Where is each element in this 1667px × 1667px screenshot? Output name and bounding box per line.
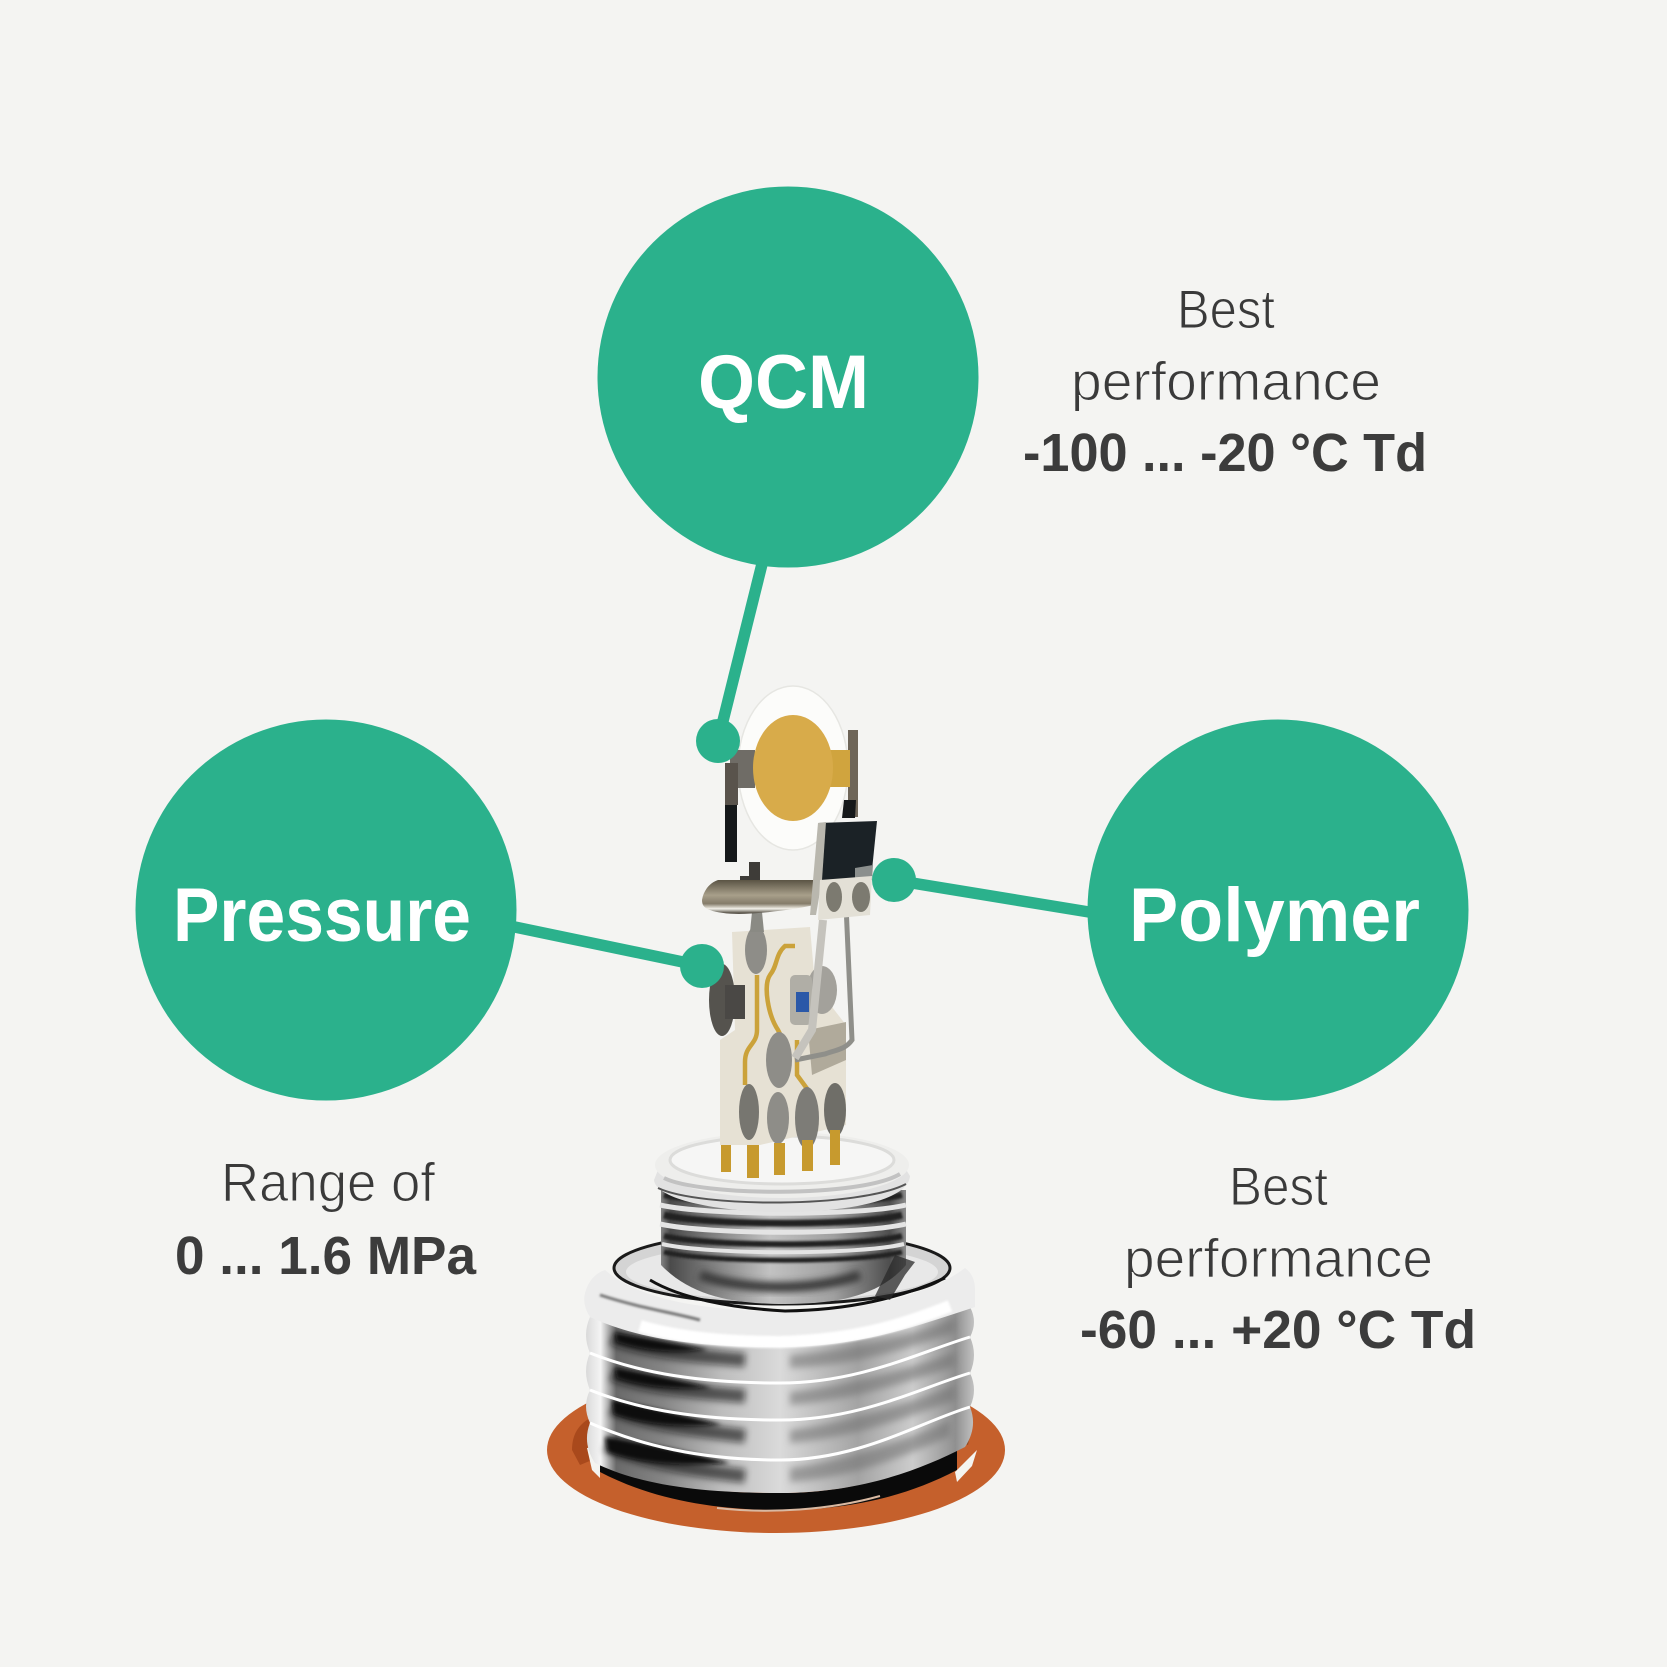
- gold traces: [745, 946, 808, 1090]
- text: QCM performance: performance: [1071, 350, 1381, 412]
- node: Pressure: Pressure: [173, 873, 471, 958]
- text: Pressure range: Range of: [221, 1151, 436, 1213]
- blue capacitor: [790, 975, 812, 1025]
- text: Polymer performance: [1080, 1155, 1476, 1360]
- collar rim: [584, 1232, 975, 1347]
- text: Pressure range: [175, 1151, 477, 1286]
- node: QCM: [598, 186, 978, 568]
- text: Pressure range: 0 ... 1.6 MPa: [175, 1226, 477, 1286]
- soft left shadow: [606, 1338, 745, 1476]
- top flange: [654, 1132, 910, 1212]
- text: Polymer performance: -60 ... +20 °C Td: [1080, 1300, 1476, 1360]
- copper sealing ring: [547, 1367, 1005, 1533]
- text: QCM performance: -100 ... -20 °C Td: [1023, 423, 1427, 483]
- circuit board: [709, 905, 852, 1178]
- node: QCM: QCM: [698, 340, 869, 425]
- connector: Pressure: [510, 926, 724, 988]
- sensor photo illustration: [547, 686, 1005, 1533]
- crystal base: [702, 880, 815, 932]
- text: QCM performance: [1023, 278, 1427, 483]
- left dark streaks: [605, 1333, 730, 1465]
- gold pins: [721, 1130, 840, 1178]
- text: Polymer performance: Best: [1229, 1155, 1328, 1217]
- solder joints: [709, 926, 846, 1149]
- node: Polymer: [1088, 720, 1468, 1100]
- text: Polymer performance: performance: [1124, 1227, 1433, 1289]
- crystal mounting pin: [740, 862, 760, 880]
- node: Polymer: Polymer: [1129, 873, 1420, 958]
- connector: Polymer: [872, 858, 1095, 913]
- threaded lower body: [586, 1307, 974, 1493]
- polymer chip assembly: [810, 821, 877, 920]
- dark base of threads: [587, 1440, 977, 1511]
- wire leads: [795, 905, 852, 1060]
- right mid-tone shading: [790, 1318, 955, 1482]
- quartz crystal disc: [725, 686, 858, 862]
- threaded neck: [660, 1190, 915, 1304]
- connector: QCM: [696, 560, 763, 763]
- thread highlight lines: [590, 1337, 970, 1460]
- node: Pressure: [136, 720, 516, 1100]
- text: QCM performance: Best: [1177, 278, 1275, 340]
